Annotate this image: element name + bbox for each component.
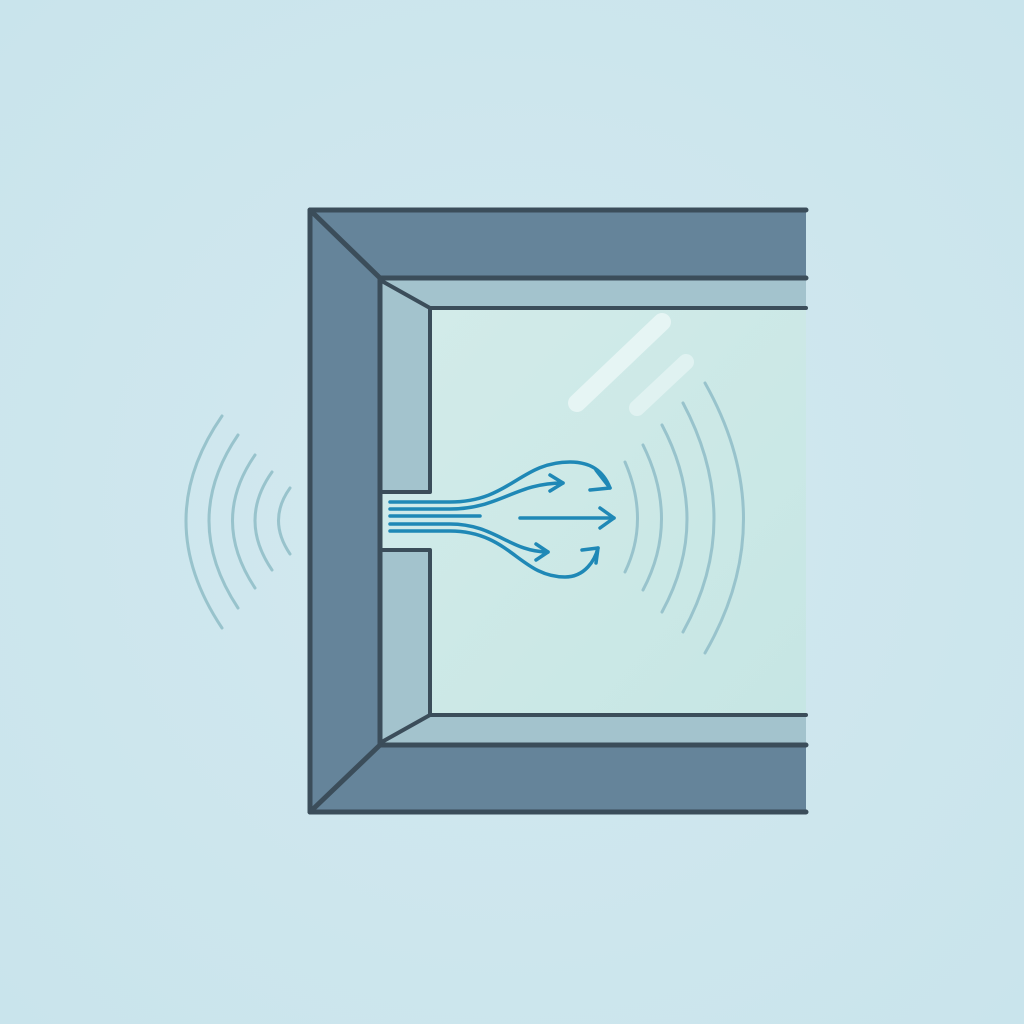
inner frame with gap [380, 278, 806, 745]
left sound waves [186, 416, 290, 628]
air flow arrows [390, 462, 614, 577]
glass pane [430, 308, 806, 715]
outer frame [310, 210, 806, 812]
right sound waves [625, 383, 744, 653]
